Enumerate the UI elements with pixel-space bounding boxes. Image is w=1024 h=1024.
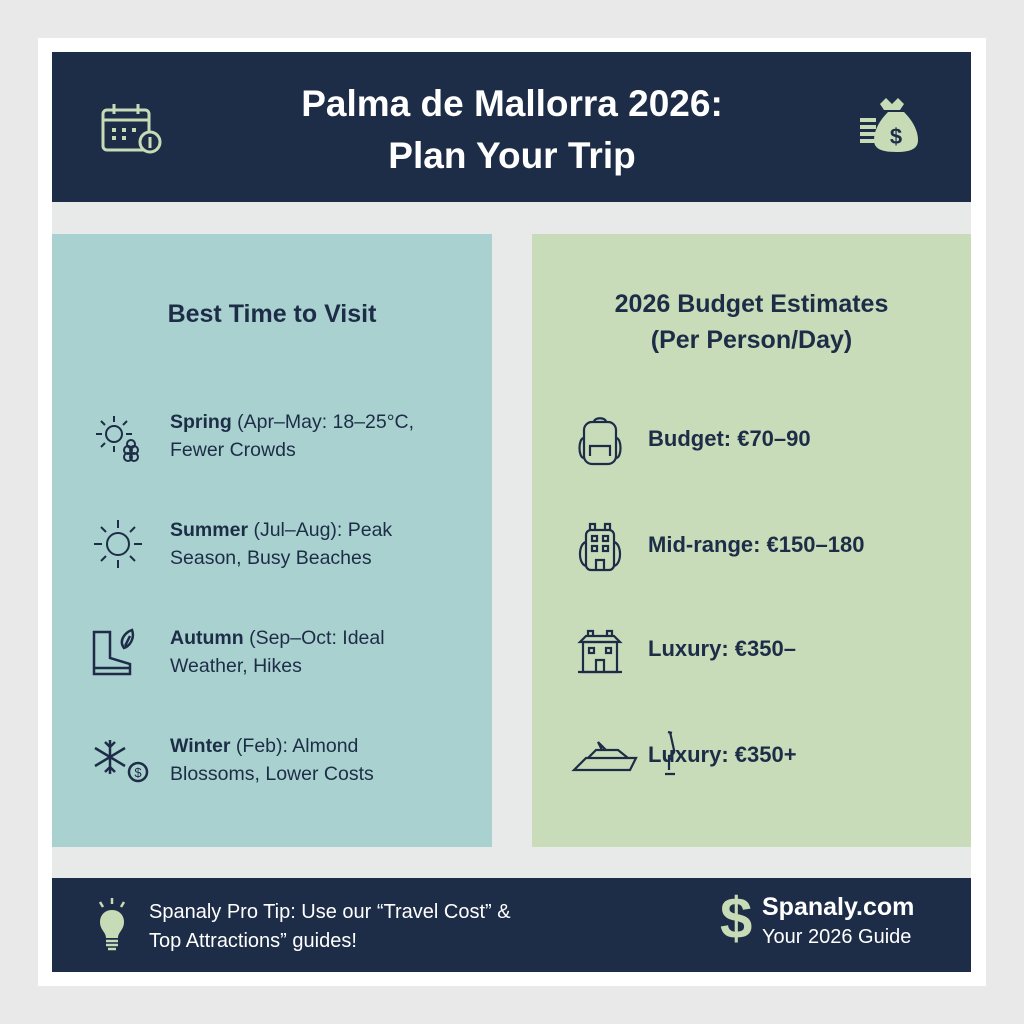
item: summer: Season, Busy Beaches [170,547,372,569]
item: summer [170,519,392,569]
item: spring [170,411,414,461]
icon: boot leaf [92,628,134,676]
icon: backpack [578,417,622,466]
footer brand [762,893,914,948]
icon: spring sun [96,416,139,462]
icon: building [578,522,622,572]
footer tip text: Top Attractions” guides! [149,930,357,952]
item: summer: Summer (Jul–Aug): Peak [170,519,392,541]
heading: budget: (Per Person/Day) [651,326,852,354]
footer brand: Your 2026 Guide [762,926,911,948]
item: luxury plus: Luxury: €350+ [648,742,797,767]
footer [52,878,971,972]
heading: budget: 2026 Budget Estimates [615,290,888,318]
footer tip text: Spanaly Pro Tip: Use our “Travel Cost” & [149,901,511,923]
panel: best time [52,234,492,847]
item: midrange: Mid-range: €150–180 [648,532,864,557]
footer tip text [149,901,511,952]
item: autumn: Autumn (Sep–Oct: Ideal [170,627,385,649]
title [301,83,723,176]
item: winter: Blossoms, Lower Costs [170,763,374,785]
item: spring: Spring (Apr–May: 18–25°C, [170,411,414,433]
icon: money bag: $ [890,124,902,149]
icon: hotel [577,630,622,674]
title: Plan Your Trip [388,135,636,176]
icon: snowflake coin: $ [134,765,142,780]
item: budget: Budget: €70–90 [648,426,811,451]
item: spring: Fewer Crowds [170,439,296,461]
footer brand: Spanaly.com [762,893,914,921]
icon: summer sun [94,520,142,568]
heading: budget [615,290,888,354]
item: winter [170,735,374,785]
header [52,52,971,202]
item: autumn [170,627,385,677]
icon: yacht [571,730,676,776]
title: Palma de Mallorra 2026: [301,83,723,124]
heading: best time: Best Time to Visit [168,300,376,328]
icon: lightbulb [99,898,125,950]
item: winter: Winter (Feb): Almond [170,735,358,757]
item: luxury: Luxury: €350– [648,636,796,661]
icon: money bag [860,98,918,152]
item: autumn: Weather, Hikes [170,655,302,677]
icon: dollar logo: $ [720,886,752,951]
panel: budget [532,234,971,847]
icon: snowflake coin [94,740,148,782]
icon: calendar [102,104,162,154]
